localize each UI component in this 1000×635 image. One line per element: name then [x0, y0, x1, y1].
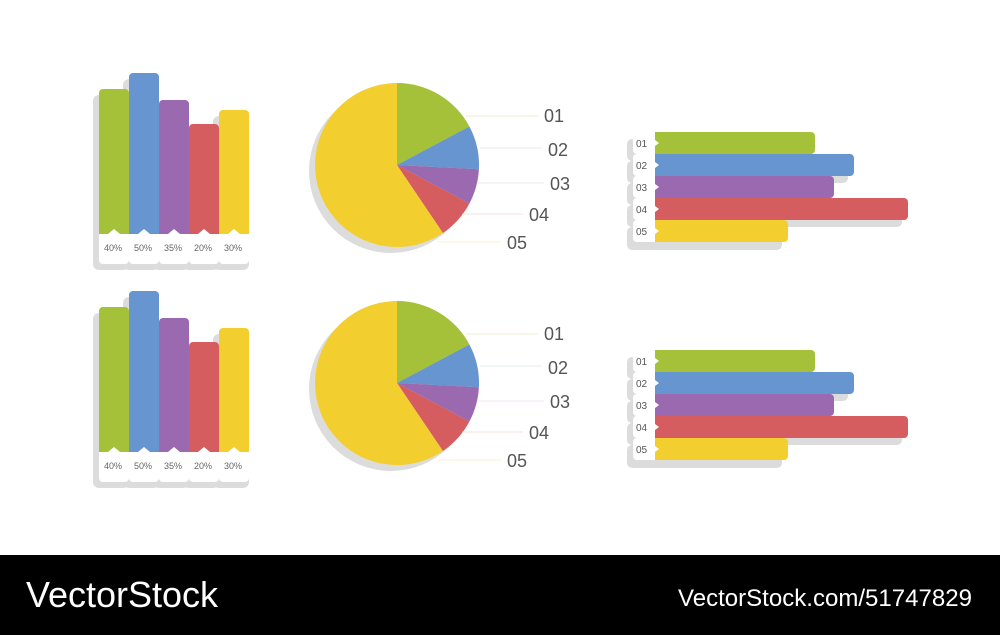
footer bar: [0, 555, 1000, 635]
footer bar: VectorStock: [26, 574, 219, 615]
infographic set: bottom: [93, 291, 908, 488]
footer bar: VectorStock.com/51747829: [678, 585, 972, 612]
infographic set: top: [93, 73, 908, 270]
